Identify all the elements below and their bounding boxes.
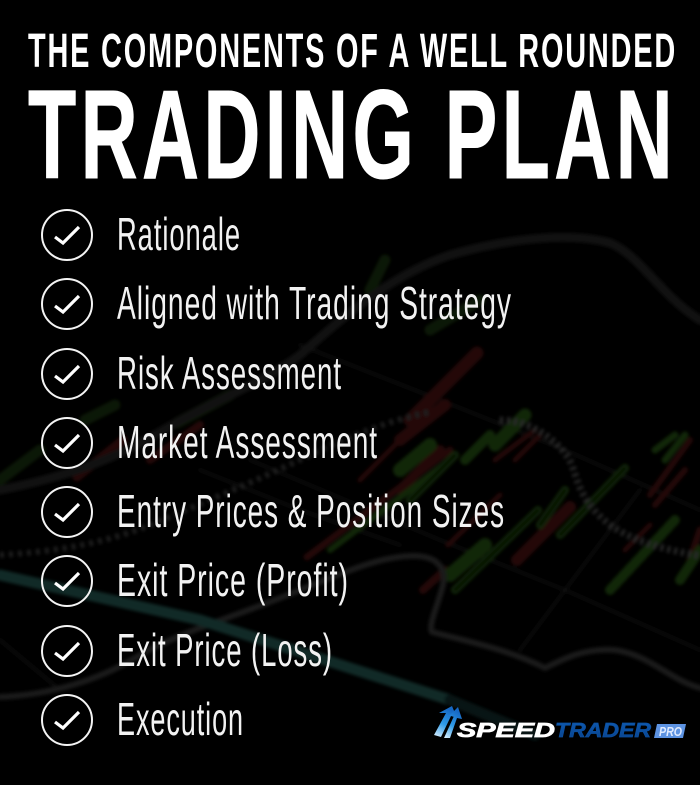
logo: SpeedTrader Pro [434, 706, 686, 742]
wordmark: TRADER: TRADER [555, 720, 652, 742]
item: Aligned with Trading Strategy [42, 277, 512, 329]
item: Risk Assessment [42, 347, 342, 399]
item: Execution [42, 693, 244, 745]
badge: PRO: PRO [659, 725, 682, 739]
wordmark: SPEED: SPEED [457, 720, 555, 742]
item: Rationale [42, 208, 241, 260]
item: Risk Assessment: Risk Assessment [117, 347, 342, 399]
item: Exit Price (Loss): Exit Price (Loss) [117, 624, 333, 676]
item: Market Assessment: Market Assessment [117, 416, 378, 468]
item: Market Assessment [42, 416, 378, 468]
item: Exit Price (Loss) [42, 624, 333, 676]
checklist [42, 208, 512, 745]
icon: double arrow [434, 706, 462, 738]
item: Exit Price (Profit): Exit Price (Profit) [117, 554, 349, 606]
item: Exit Price (Profit) [42, 554, 349, 606]
item: Entry Prices & Position Sizes [42, 485, 505, 537]
blurred stock chart backdrop [0, 237, 700, 735]
item: Rationale: Rationale [117, 208, 241, 260]
item: Execution: Execution [117, 693, 244, 745]
